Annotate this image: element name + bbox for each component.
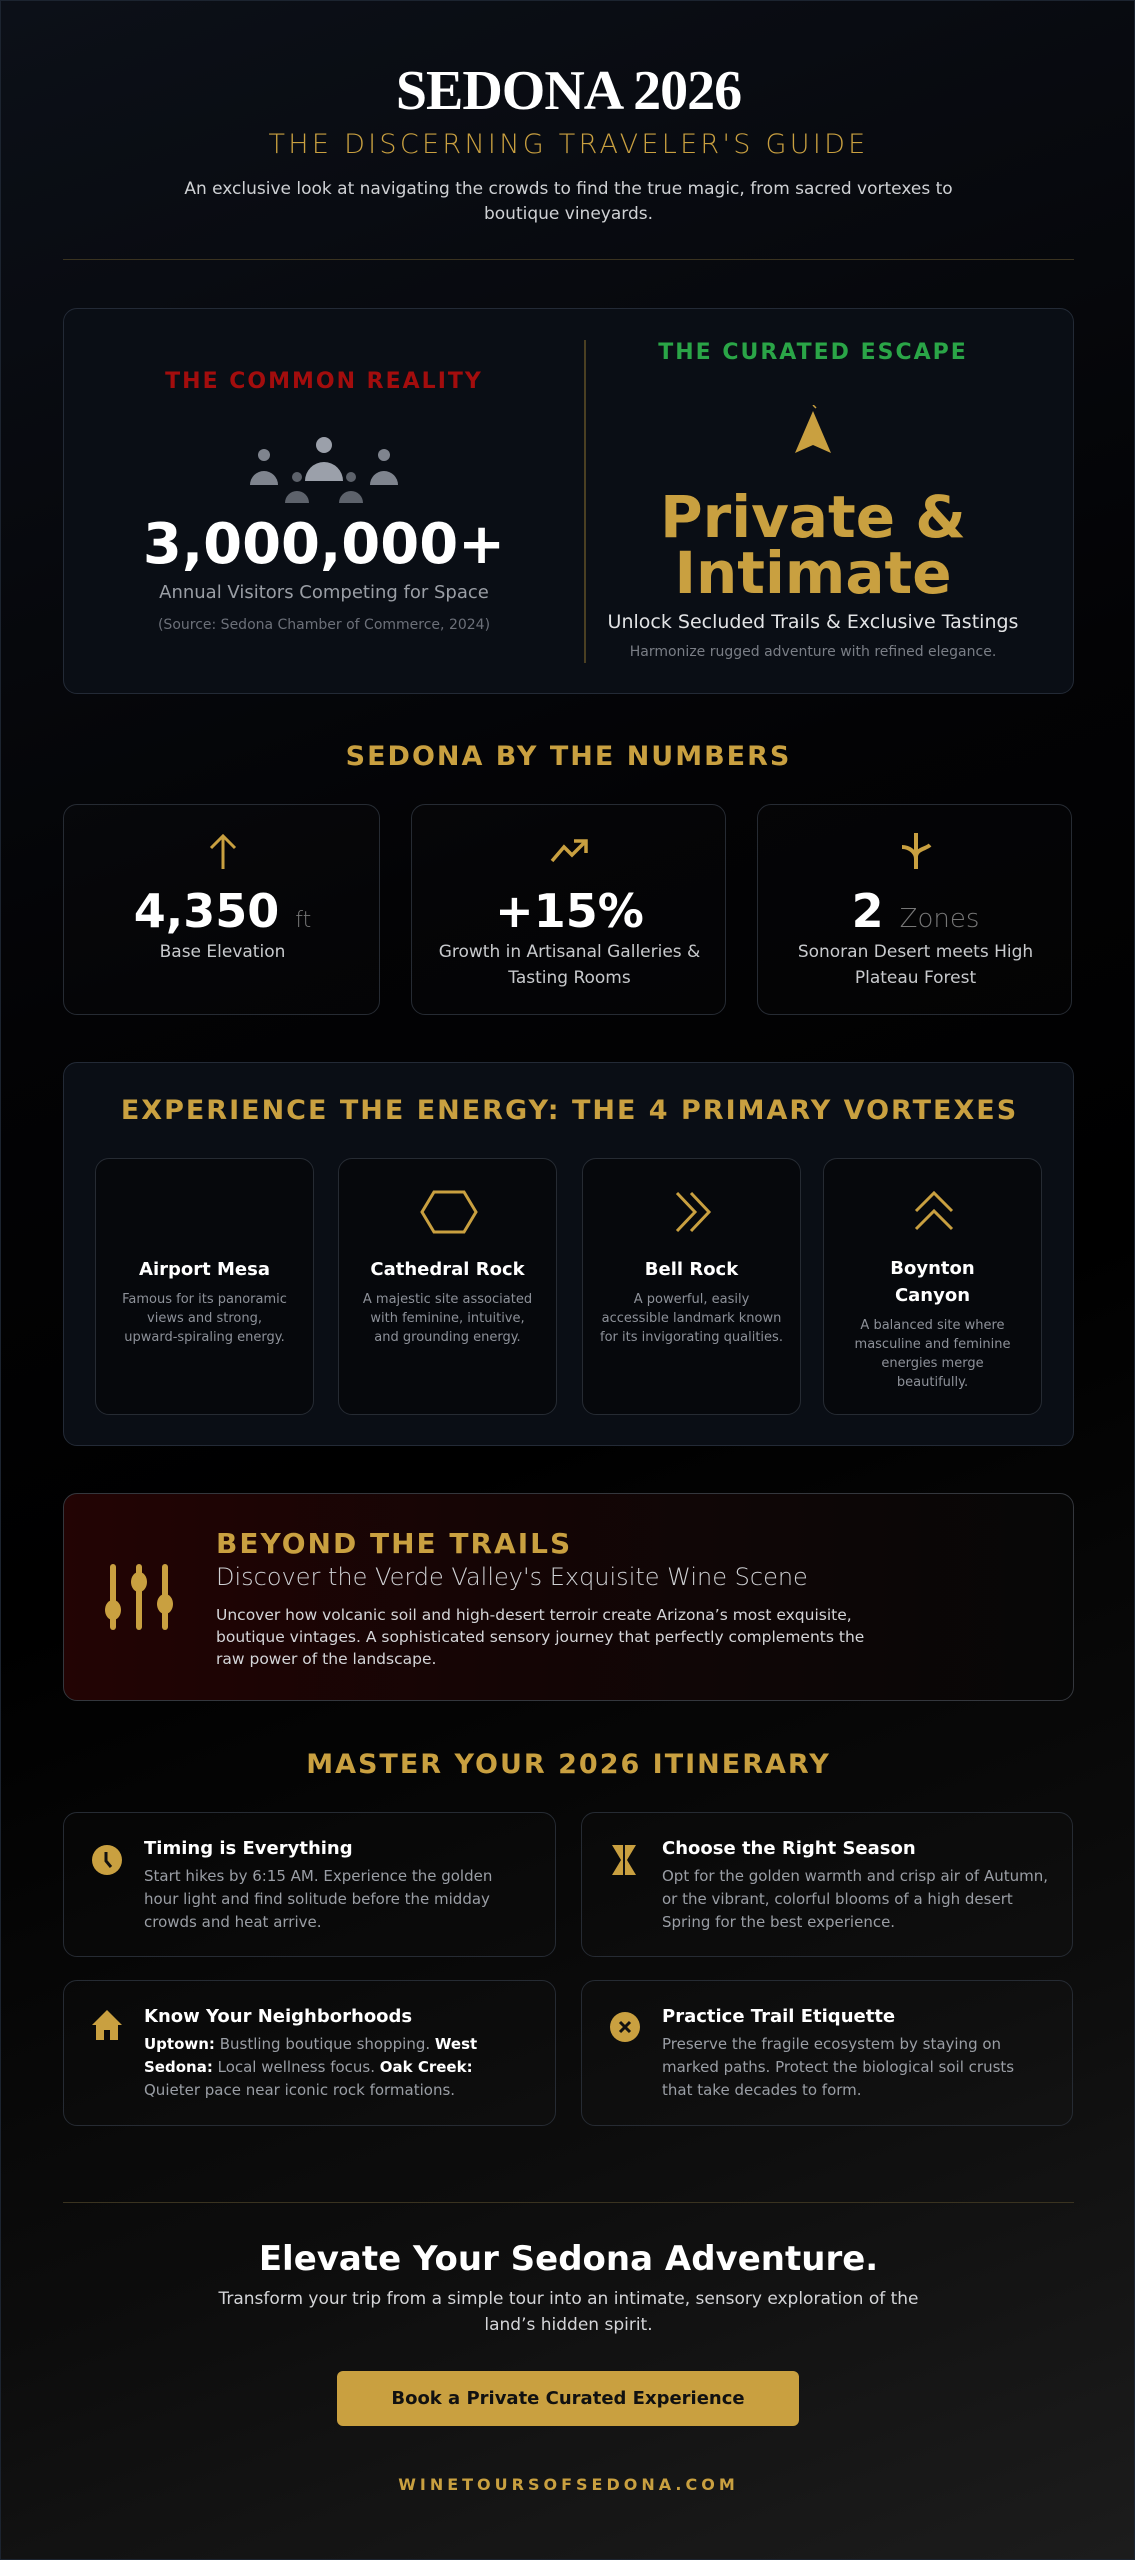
icon: sliders <box>105 1564 173 1630</box>
icon: navigation arrow <box>795 405 831 453</box>
icon: clock <box>92 1845 122 1875</box>
stat card: growth <box>411 804 726 1015</box>
icon: crowd <box>250 437 398 503</box>
tip: etiquette: Preserve the fragile ecosystem by staying on marked paths. Protect the biological soil crusts that take decades to form. <box>662 2035 1014 2099</box>
subheading: Discover the Verde Valley's Exquisite Wine Scene <box>216 1563 808 1591</box>
tip: season: Opt for the golden warmth and crisp air of Autumn, or the vibrant, colorful blooms of a high desert Spring for the best experience. <box>662 1867 1048 1931</box>
tip: etiquette <box>581 1980 1073 2126</box>
intro text: An exclusive look at navigating the crowds to find the true magic, from sacred vortexes to boutique vineyards. <box>184 179 953 224</box>
vortex card: airport mesa <box>95 1158 314 1415</box>
icon: trend <box>550 839 588 862</box>
icon: double chevron right <box>676 1192 711 1232</box>
icon: hourglass <box>612 1845 636 1875</box>
tip: neighborhoods <box>63 1980 556 2126</box>
heading: common reality: THE COMMON REALITY <box>165 369 483 394</box>
tip: season: Choose the Right Season <box>662 1838 916 1859</box>
heading: vortexes: EXPERIENCE THE ENERGY: THE 4 PRIMARY VORTEXES <box>121 1095 1018 1126</box>
vortex card: airport mesa: Famous for its panoramic views and strong, upward-spiraling energy. <box>122 1292 287 1345</box>
label: annual visitors: Annual Visitors Competing for Space <box>159 582 489 603</box>
panel: comparison <box>63 308 1074 694</box>
headline: private & intimate: Private & <box>660 483 966 551</box>
value: 2 Zones <box>852 884 979 938</box>
vortex card: boynton canyon: Canyon <box>895 1285 970 1306</box>
button: Book a Private Curated Experience <box>391 2388 745 2409</box>
vortex card: bell rock: A powerful, easily accessible landmark known for its invigorating qualities. <box>600 1292 783 1345</box>
text: Uncover how volcanic soil and high-desert terroir create Arizona’s most exquisite, boutique vintages. A sophisticated sensory journey that perfectly complements the raw power of the landscape. <box>216 1606 864 1668</box>
headline: private & intimate: Intimate <box>674 539 952 607</box>
headline: private & intimate <box>660 483 966 607</box>
tip: timing <box>63 1812 556 1957</box>
icon: double chevron up <box>915 1191 953 1230</box>
stat card: zones <box>757 804 1072 1015</box>
icon: x circle <box>610 2012 640 2042</box>
heading: curated escape: THE CURATED ESCAPE <box>658 340 968 365</box>
cta heading: Elevate Your Sedona Adventure. <box>259 2239 878 2279</box>
icon: hexagon <box>420 1190 478 1234</box>
panel: beyond the trails <box>63 1493 1074 1701</box>
icon: up arrow <box>210 834 236 869</box>
footer url: WINETOURSOFSEDONA.COM <box>398 2475 739 2494</box>
vortex card: boynton canyon <box>823 1158 1042 1415</box>
subtitle: THE DISCERNING TRAVELER'S GUIDE <box>268 129 869 160</box>
stat: 3,000,000+: 3,000,000+ <box>143 512 505 577</box>
vortex card: cathedral rock <box>338 1158 557 1415</box>
source: (Source: Sedona Chamber of Commerce, 2024) <box>158 617 490 633</box>
heading: BEYOND THE TRAILS <box>216 1527 572 1560</box>
text: unlock: Unlock Secluded Trails & Exclusive Tastings <box>608 611 1018 633</box>
title: SEDONA 2026 <box>396 60 741 122</box>
vortex card: cathedral rock: Cathedral Rock <box>370 1259 525 1280</box>
button <box>337 2371 799 2426</box>
label: Growth in Artisanal Galleries & Tasting Rooms <box>439 942 700 988</box>
tip: neighborhoods: Uptown: Bustling boutique shopping. West Sedona: Local wellness focus. Oak Creek: Quieter pace near iconic rock formations. <box>144 2035 477 2099</box>
vortex card: cathedral rock: A majestic site associated with feminine, intuitive, and grounding energy. <box>363 1292 532 1345</box>
tip: timing: Timing is Everything <box>144 1838 353 1859</box>
value: 4,350 ft <box>134 884 311 938</box>
label: Base Elevation <box>160 942 285 962</box>
icon: split <box>902 833 932 869</box>
stat card: elevation <box>63 804 380 1015</box>
vortex card: bell rock: Bell Rock <box>645 1259 738 1280</box>
heading: by the numbers: SEDONA BY THE NUMBERS <box>346 741 791 772</box>
vortex card: bell rock <box>582 1158 801 1415</box>
panel: vortexes <box>63 1062 1074 1446</box>
value: +15% <box>495 884 644 938</box>
vortex card: airport mesa: Airport Mesa <box>139 1259 270 1280</box>
tip: season <box>581 1812 1073 1957</box>
icon: house <box>92 2010 122 2040</box>
cta text: Transform your trip from a simple tour into an intimate, sensory exploration of the land’s hidden spirit. <box>218 2289 919 2335</box>
vortex card: boynton canyon: A balanced site where masculine and feminine energies merge beautifully. <box>855 1318 1010 1390</box>
label: Sonoran Desert meets High Plateau Forest <box>798 942 1033 988</box>
tip: timing: Start hikes by 6:15 AM. Experience the golden hour light and find solitude before the midday crowds and heat arrive. <box>144 1867 492 1931</box>
tip: neighborhoods: Know Your Neighborhoods <box>144 2006 412 2027</box>
vortex card: boynton canyon: Boynton <box>890 1258 975 1279</box>
tip: etiquette: Practice Trail Etiquette <box>662 2006 895 2027</box>
text: harmonize: Harmonize rugged adventure with refined elegance. <box>630 644 996 660</box>
heading: itinerary: MASTER YOUR 2026 ITINERARY <box>306 1749 831 1780</box>
